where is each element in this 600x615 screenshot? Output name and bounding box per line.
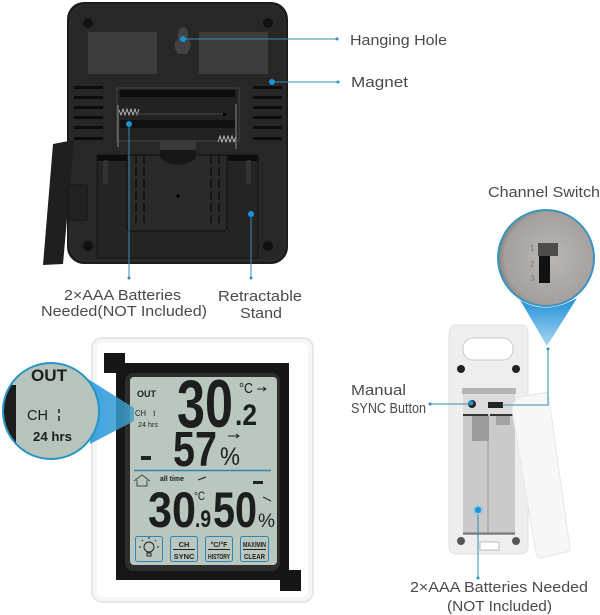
screws	[83, 18, 93, 28]
callout: batteries needed, sensor: 2×AAA Batteries Needed	[410, 579, 588, 596]
panel: open sensor unit	[449, 325, 528, 554]
button: CH SYNC: SYNC	[174, 552, 195, 561]
icon: backlight button	[136, 536, 162, 562]
button: MAX/MIN CLEAR: CLEAR	[244, 552, 265, 561]
button: C/F HISTORY: HISTORY	[208, 554, 230, 561]
LCD screen: all time	[160, 476, 184, 483]
callout: channel switch magnifier: 3	[530, 274, 535, 283]
magnet plates	[88, 32, 157, 74]
LCD screen	[130, 366, 277, 565]
LCD screen: °C	[239, 380, 253, 397]
LCD screen: .2	[235, 399, 257, 432]
callout: channel switch magnifier: 1	[530, 244, 535, 253]
LCD screen: CH	[135, 409, 146, 418]
callout: retractable stand: Retractable	[218, 288, 302, 305]
button: C/F HISTORY: °C/°F	[211, 541, 228, 549]
callout: batteries needed, back: Needed(NOT Included)	[41, 303, 207, 320]
callout: hanging hole: Hanging Hole	[350, 32, 447, 49]
LCD screen: 50	[213, 482, 257, 538]
panel: front display unit	[92, 338, 313, 602]
callout: batteries needed, back	[41, 121, 207, 320]
black frame	[104, 353, 301, 591]
LCD screen: 57	[173, 423, 217, 477]
callout: magnifier on channel readout: 24 hrs	[33, 429, 72, 444]
LCD screen: .9	[195, 506, 211, 533]
callout: retractable stand: Stand	[240, 305, 282, 322]
callout: batteries needed, sensor	[410, 505, 588, 615]
callout: magnifier on channel readout	[0, 363, 134, 459]
indoor readings	[134, 475, 150, 486]
panel: back of thermometer	[43, 2, 288, 265]
battery compartment	[462, 388, 516, 394]
vents	[74, 86, 282, 140]
callout: manual sync button: Manual	[351, 382, 406, 399]
callout: manual sync button: SYNC Button	[351, 400, 426, 417]
outdoor readings: OUT	[137, 389, 156, 399]
callout: magnet	[269, 74, 409, 91]
LCD screen: 30	[148, 482, 196, 538]
callout: retractable stand	[218, 211, 302, 322]
LCD screen: %	[258, 511, 275, 532]
callout: manual sync button	[351, 382, 474, 417]
LCD screen: 24 hrs	[138, 422, 158, 429]
callout: batteries needed, sensor: (NOT Included)	[447, 598, 552, 615]
callout: magnifier on channel readout: CH	[27, 407, 48, 424]
callout: channel switch magnifier	[488, 184, 600, 405]
callout: batteries needed, back: 2×AAA Batteries	[64, 287, 181, 304]
button: CH SYNC	[170, 536, 198, 562]
button: CH SYNC: CH	[179, 540, 189, 549]
callout: hanging hole	[180, 32, 447, 49]
LCD screen: °C	[194, 489, 205, 503]
battery cover	[512, 392, 570, 558]
retractable stand side view	[43, 140, 74, 265]
button: MAX/MIN CLEAR	[240, 536, 268, 562]
stand panel	[97, 155, 258, 258]
callout: channel switch magnifier: 2	[530, 260, 535, 269]
callout: magnifier on channel readout: OUT	[31, 366, 68, 385]
LCD screen: 30	[177, 366, 233, 442]
callout: channel switch magnifier: Channel Switch	[488, 184, 600, 201]
button: C/F HISTORY	[206, 536, 232, 562]
button: MAX/MIN CLEAR: MAX/MIN	[243, 542, 266, 549]
callout: magnet: Magnet	[351, 74, 409, 91]
battery compartment	[117, 88, 239, 141]
LCD screen: ⁝	[153, 409, 156, 418]
LCD screen: %	[220, 443, 240, 471]
icon: keyhole hanging hole	[174, 27, 191, 54]
